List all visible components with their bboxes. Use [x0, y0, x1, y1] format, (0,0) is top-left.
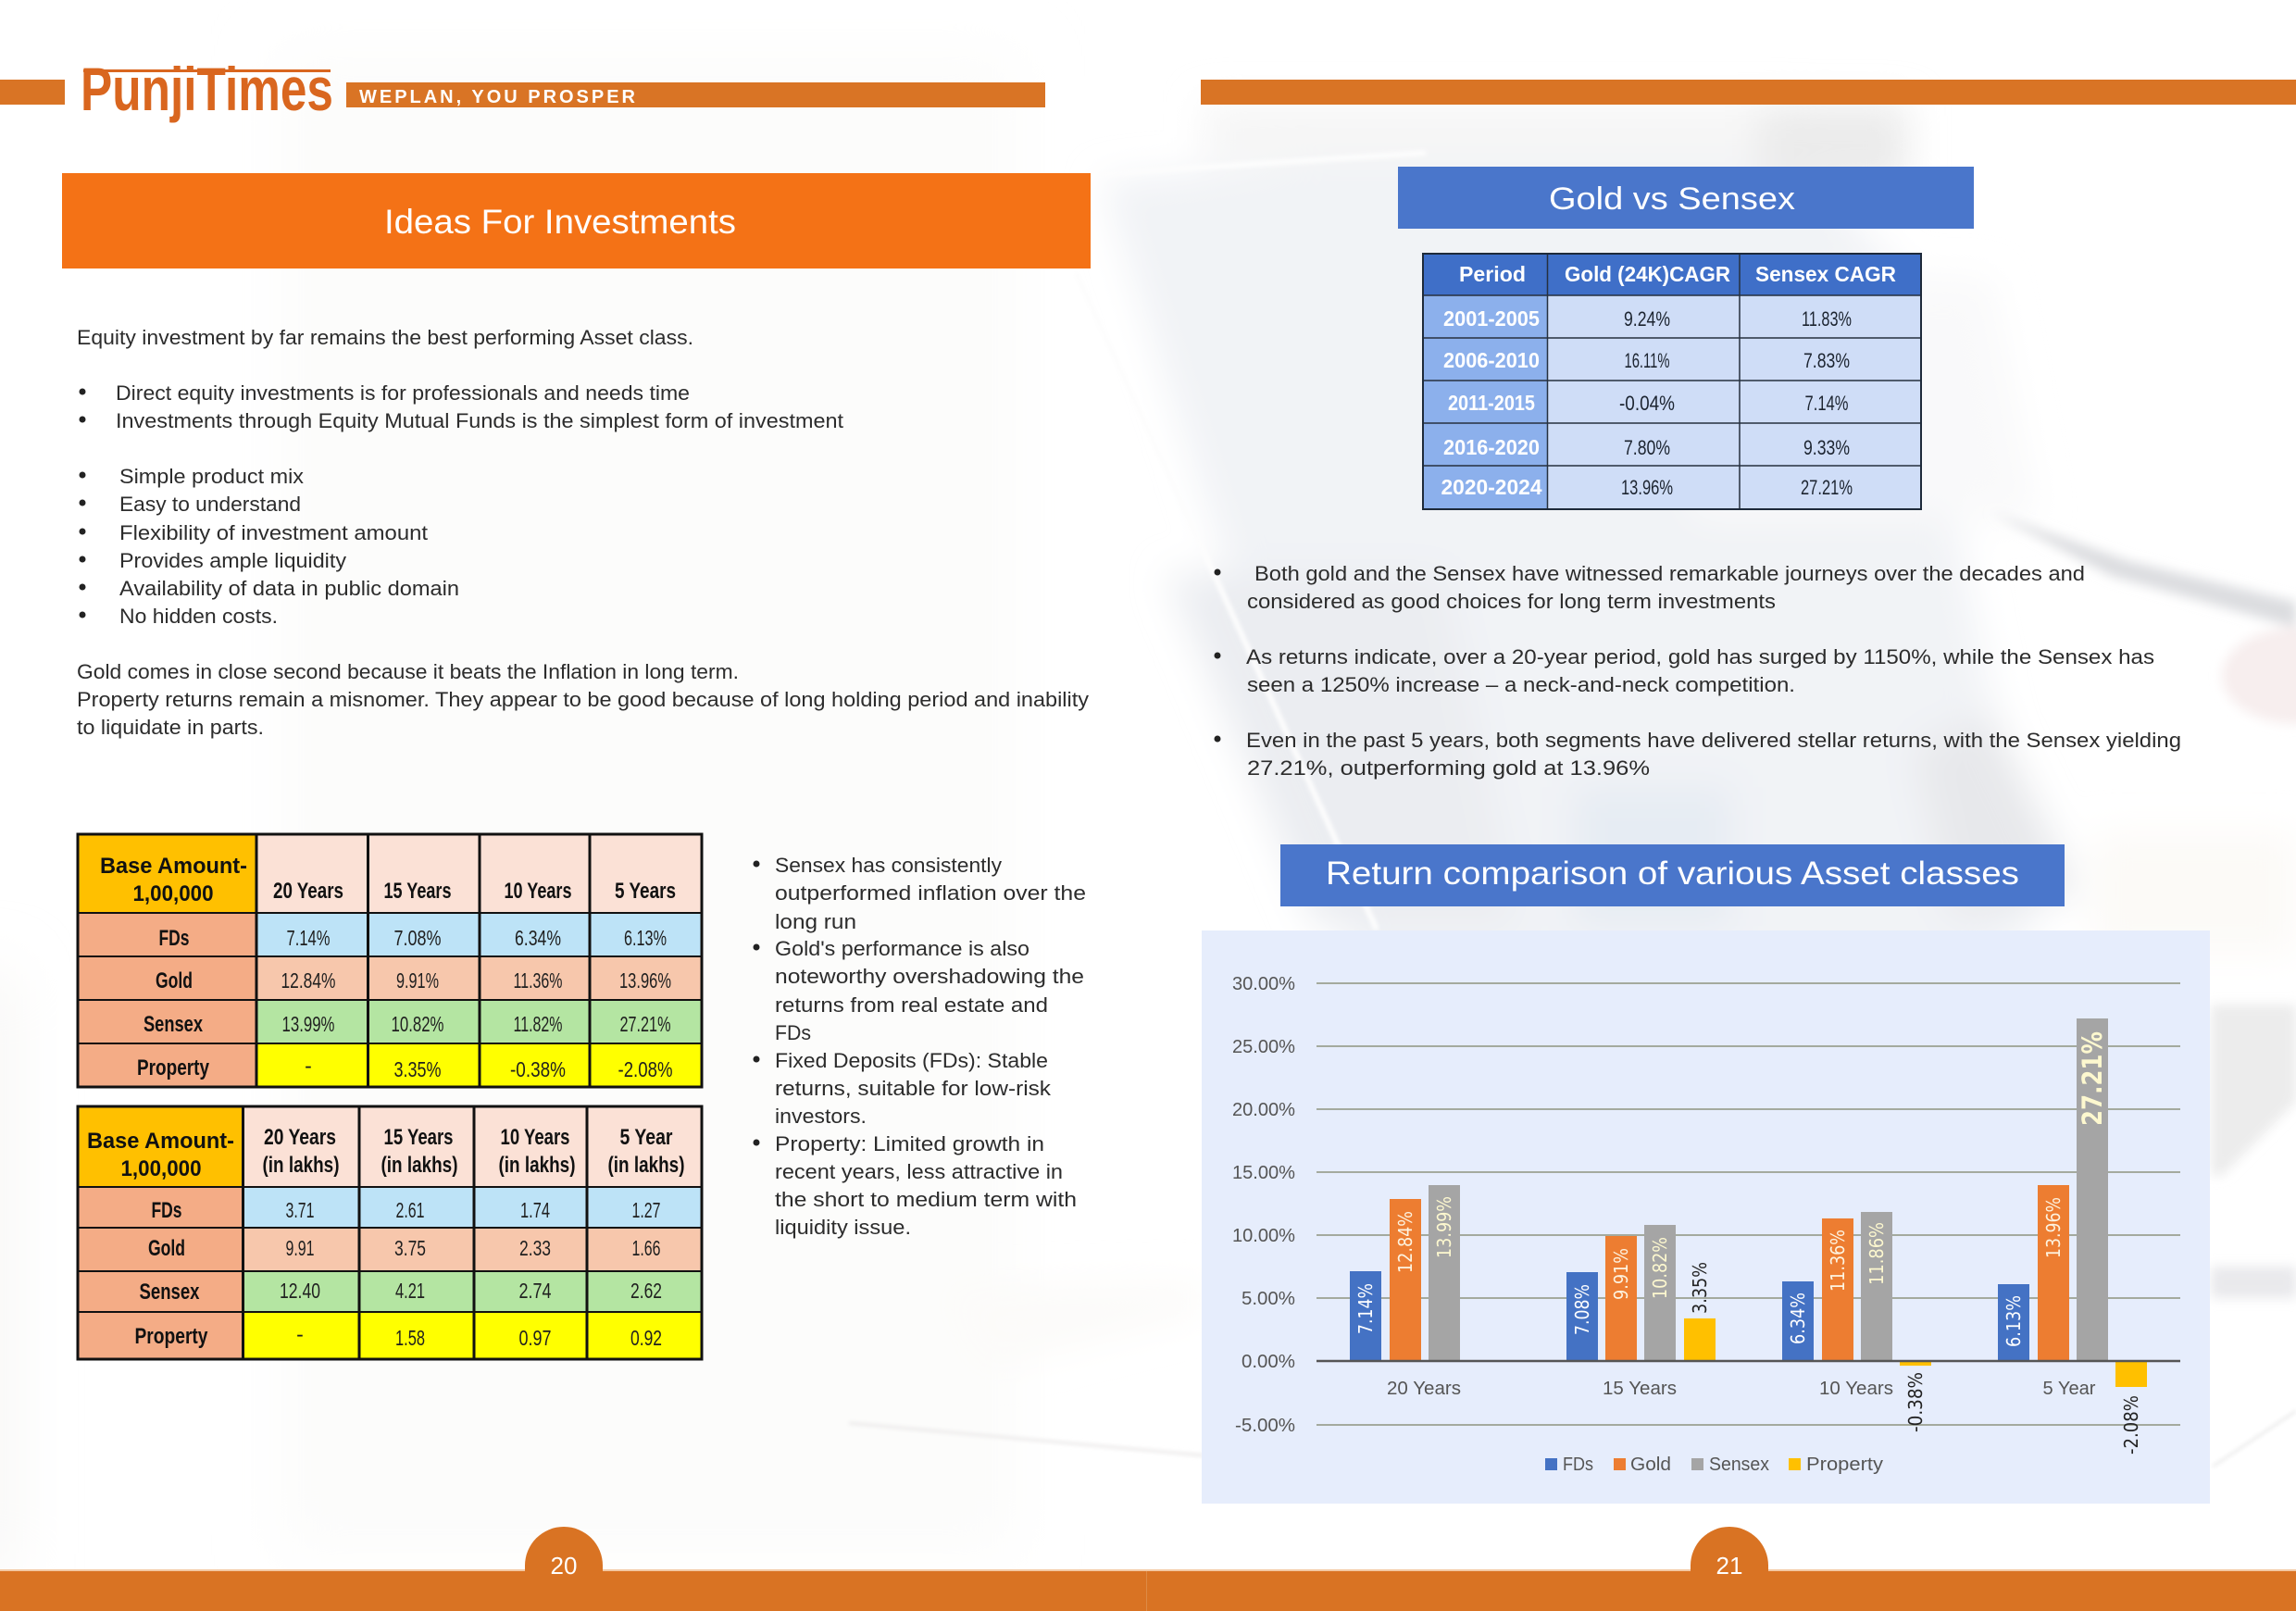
table: returns by period: 9.91% [396, 968, 439, 993]
text block: equity overview: Property returns remain a misnomer. They appear to be good because of long holding period and inability [77, 688, 1089, 711]
table: returns by period: -0.38% [510, 1057, 566, 1081]
bar chart: return comparison [1202, 930, 2210, 1504]
table: value in lakhs: 3.71 [285, 1198, 315, 1222]
table: value in lakhs: Property [135, 1324, 208, 1349]
page number 21: 21 [1716, 1552, 1742, 1580]
heading: Return comparison of various Asset classes: Return comparison of various Asset classes [1326, 855, 2019, 892]
table: returns by period: -2.08% [618, 1057, 672, 1081]
bullet list: gold vs sensex commentary: Even in the past 5 years, both segments have delivered stellar returns, with the Sensex yielding [1246, 729, 2181, 752]
table: Gold vs Sensex CAGR: Period [1459, 262, 1526, 286]
table: returns by period: 3.35% [394, 1057, 441, 1081]
y axis labels: 15.00% [1232, 1163, 1295, 1183]
tagline bar: WEPLAN, YOU PROSPER [359, 87, 636, 107]
bullet list: asset class notes: returns, suitable for low-risk [775, 1077, 1052, 1100]
data labels: 10.82% [1649, 1237, 1671, 1299]
data labels: 13.96% [2042, 1197, 2065, 1258]
table: Gold vs Sensex CAGR: 2020-2024 [1441, 475, 1542, 499]
data labels: 6.34% [1787, 1293, 1809, 1344]
category labels [1387, 1379, 2096, 1399]
page number 20: 20 [551, 1552, 577, 1580]
table: value in lakhs: (in lakhs) [607, 1153, 685, 1178]
table: Gold vs Sensex CAGR: 13.96% [1621, 476, 1673, 499]
bullet list: asset class notes: Property: Limited growth in [775, 1132, 1044, 1155]
table: returns by period: - [305, 1054, 312, 1078]
table: returns by period: 7.14% [287, 926, 330, 950]
table: returns by period: 12.84% [281, 968, 335, 993]
data labels: 11.36% [1827, 1230, 1849, 1292]
table: returns by period: 7.08% [394, 926, 441, 950]
text block: equity overview: No hidden costs. [119, 605, 278, 628]
table: value in lakhs: 1.66 [631, 1236, 661, 1260]
data labels: 12.84% [1394, 1211, 1416, 1273]
table: value in lakhs: 0.97 [518, 1326, 552, 1350]
legend [1545, 1455, 1883, 1475]
table: returns by period: 11.36% [513, 968, 563, 993]
table: value in lakhs: 1.27 [631, 1198, 661, 1222]
heading: Gold vs Sensex [1398, 167, 1974, 229]
y axis labels: 25.00% [1232, 1037, 1295, 1057]
table: value in lakhs: 1.58 [395, 1326, 425, 1350]
table: value in lakhs: 20 Years [264, 1125, 336, 1150]
bullet list: asset class notes: noteworthy overshadowing the [775, 965, 1084, 988]
data labels: 27.21% [2077, 1031, 2108, 1126]
bullet list: asset class notes: the short to medium term with [775, 1188, 1077, 1211]
table: returns by period: 10 Years [504, 879, 572, 904]
data labels: 6.13% [2003, 1295, 2025, 1347]
table: returns by period: 10.82% [391, 1012, 444, 1036]
table: returns by period: 11.82% [513, 1012, 563, 1036]
table: Gold vs Sensex CAGR: 7.80% [1624, 436, 1670, 459]
table: Gold vs Sensex CAGR: 2016-2020 [1443, 435, 1540, 459]
category labels: 15 Years [1603, 1379, 1677, 1399]
bullet list: asset class notes: FDs [775, 1021, 811, 1044]
bullet list: asset class notes: Fixed Deposits (FDs): Stable [775, 1049, 1048, 1072]
bullet list: asset class notes: recent years, less attractive in [775, 1160, 1063, 1183]
bullet list: asset class notes: liquidity issue. [775, 1216, 911, 1239]
table: value in lakhs: 2.62 [630, 1279, 662, 1303]
header: left page [0, 55, 1045, 123]
category labels: 20 Years [1387, 1379, 1461, 1399]
table: value in lakhs: - [296, 1322, 304, 1346]
text block: equity overview: to liquidate in parts. [77, 716, 264, 739]
data labels: -0.38% [1904, 1372, 1927, 1432]
bullet list: asset class notes: returns from real estate and [775, 993, 1048, 1017]
table: value in lakhs: 1.74 [520, 1198, 550, 1222]
data labels [1354, 1031, 2142, 1455]
table: returns by period: Property [137, 1055, 210, 1080]
bars: Sensex [1429, 1018, 2108, 1361]
footer bar with page numbers [0, 1527, 2296, 1611]
category labels: 5 Year [2042, 1379, 2096, 1399]
heading: Ideas For Investments: Ideas For Investments [384, 203, 736, 241]
table: Gold vs Sensex CAGR: 11.83% [1802, 307, 1852, 331]
data labels: -2.08% [2120, 1395, 2142, 1455]
table: value in lakhs: 0.92 [630, 1326, 662, 1350]
table: returns by period: Base Amount- [100, 854, 247, 879]
table: returns by period: 13.96% [619, 968, 671, 993]
table: Gold vs Sensex CAGR: 2006-2010 [1443, 348, 1540, 372]
legend: Sensex [1709, 1455, 1769, 1475]
y axis labels: 5.00% [1242, 1289, 1295, 1309]
table: value in lakhs: (in lakhs) [263, 1153, 339, 1178]
y axis labels: 10.00% [1232, 1226, 1295, 1246]
table: Gold vs Sensex CAGR: 16.11% [1624, 349, 1670, 372]
table: value in lakhs: Sensex [139, 1280, 200, 1305]
data labels: 7.14% [1354, 1283, 1377, 1334]
bars: Property [1684, 1318, 2147, 1387]
heading: Ideas For Investments [62, 173, 1091, 268]
table: value in lakhs: 2.61 [396, 1198, 424, 1222]
table: returns by period: 15 Years [383, 879, 452, 904]
table: value in lakhs: FDs [152, 1198, 181, 1223]
table: value in lakhs: 5 Year [620, 1125, 672, 1150]
bullet list: gold vs sensex commentary: 27.21%, outperforming gold at 13.96% [1247, 756, 1650, 780]
bullet list: gold vs sensex commentary [1215, 562, 2181, 780]
category labels: 10 Years [1819, 1379, 1893, 1399]
data labels: 9.91% [1610, 1248, 1632, 1300]
text block: equity overview: Simple product mix [119, 465, 304, 488]
table: returns by period: 1,00,000 [133, 881, 213, 906]
data labels: 7.08% [1571, 1284, 1593, 1335]
table: returns by period: 27.21% [620, 1012, 670, 1036]
bullet list: asset class notes: outperformed inflation over the [775, 881, 1086, 905]
data labels: 13.99% [1433, 1196, 1455, 1258]
table: value in lakhs: 2.33 [519, 1236, 551, 1260]
table: Gold vs Sensex CAGR: Sensex CAGR [1755, 262, 1896, 286]
table: returns by period [78, 834, 702, 1087]
text block: equity overview: Provides ample liquidity [119, 549, 346, 572]
table: value in lakhs: 9.91 [285, 1236, 315, 1260]
bullet list: gold vs sensex commentary: As returns indicate, over a 20-year period, gold has surged by 1150%, while the Sensex has [1246, 645, 2154, 668]
table: value in lakhs: Base Amount- [87, 1129, 234, 1154]
table: Gold vs Sensex CAGR: 9.24% [1624, 307, 1670, 331]
y axis labels [1232, 974, 1295, 1436]
table: Gold vs Sensex CAGR: -0.04% [1619, 392, 1675, 415]
bullet list: gold vs sensex commentary: seen a 1250% increase – a neck-and-neck competition. [1247, 673, 1795, 696]
table: value in lakhs: 1,00,000 [120, 1156, 202, 1181]
text block: equity overview: Investments through Equity Mutual Funds is the simplest form of investment [116, 409, 843, 432]
text block: equity overview: Equity investment by far remains the best performing Asset class. [77, 326, 693, 349]
table: Gold vs Sensex CAGR: 9.33% [1803, 436, 1850, 459]
table: value in lakhs: Gold [148, 1236, 185, 1261]
table: returns by period: FDs [159, 926, 189, 951]
table: Gold vs Sensex CAGR: 27.21% [1801, 476, 1853, 499]
table: returns by period: 20 Years [273, 879, 343, 904]
table: Gold vs Sensex CAGR: 7.14% [1805, 392, 1848, 415]
bullet list: gold vs sensex commentary: Both gold and the Sensex have witnessed remarkable journeys over the decades and [1254, 562, 2085, 585]
data labels: 11.86% [1866, 1222, 1888, 1285]
table: returns by period: 13.99% [281, 1012, 335, 1036]
y axis labels: 0.00% [1242, 1352, 1295, 1372]
legend: FDs [1563, 1455, 1593, 1475]
table: returns by period: 6.34% [515, 926, 561, 950]
table: value in lakhs: 15 Years [383, 1125, 454, 1150]
legend: Gold [1630, 1455, 1671, 1475]
text block: equity overview [77, 326, 1089, 739]
heading: Gold vs Sensex: Gold vs Sensex [1549, 181, 1795, 217]
table: Gold vs Sensex CAGR: 2011-2015 [1448, 391, 1535, 415]
logo: PunjiTimes: PunjiTimes [81, 55, 333, 123]
table: value in lakhs: 10 Years [500, 1125, 570, 1150]
text block: equity overview: Flexibility of investment amount [119, 521, 428, 544]
table: returns by period: Sensex [144, 1012, 203, 1037]
text block: equity overview: Easy to understand [119, 493, 301, 516]
table: value in lakhs: 3.75 [394, 1236, 426, 1260]
bullet list: asset class notes: long run [775, 910, 856, 933]
table: Gold vs Sensex CAGR: 2001-2005 [1443, 306, 1540, 331]
table: Gold vs Sensex CAGR: 7.83% [1803, 349, 1850, 372]
text block: equity overview: Availability of data in public domain [119, 577, 459, 600]
table: returns by period: 5 Years [615, 879, 676, 904]
bullet list: asset class notes: Sensex has consistently [775, 854, 1002, 877]
bullet list: gold vs sensex commentary: considered as good choices for long term investments [1247, 590, 1776, 613]
legend: Property [1806, 1455, 1883, 1475]
table: Gold vs Sensex CAGR [1423, 254, 1921, 509]
bars: FDs [1350, 1271, 2029, 1361]
bullet list: asset class notes: investors. [775, 1105, 867, 1128]
table: value in lakhs: 2.74 [518, 1279, 552, 1303]
table: value in lakhs: 4.21 [395, 1279, 425, 1303]
table: returns by period: Gold [156, 968, 193, 993]
y axis labels: 20.00% [1232, 1100, 1295, 1120]
header strip: right page [1201, 80, 2296, 105]
bars: Gold [1390, 1185, 2069, 1361]
table: value in lakhs: 12.40 [280, 1279, 320, 1303]
text block: equity overview: Direct equity investments is for professionals and needs time [116, 381, 690, 405]
data labels: 3.35% [1689, 1262, 1711, 1314]
table: value in lakhs [78, 1106, 702, 1359]
bullet list: asset class notes: Gold's performance is also [775, 937, 1029, 960]
table: Gold vs Sensex CAGR: Gold (24K)CAGR [1565, 262, 1730, 286]
text block: equity overview: Gold comes in close second because it beats the Inflation in long term. [77, 660, 739, 683]
bullet list: asset class notes [754, 854, 1086, 1239]
y axis labels: -5.00% [1235, 1416, 1295, 1436]
tagline bar [346, 82, 1045, 107]
heading: Return comparison of various Asset classes [1280, 844, 2065, 906]
table: value in lakhs: (in lakhs) [381, 1153, 457, 1178]
table: value in lakhs: (in lakhs) [498, 1153, 576, 1178]
table: returns by period: 6.13% [624, 926, 667, 950]
y axis labels: 30.00% [1232, 974, 1295, 994]
